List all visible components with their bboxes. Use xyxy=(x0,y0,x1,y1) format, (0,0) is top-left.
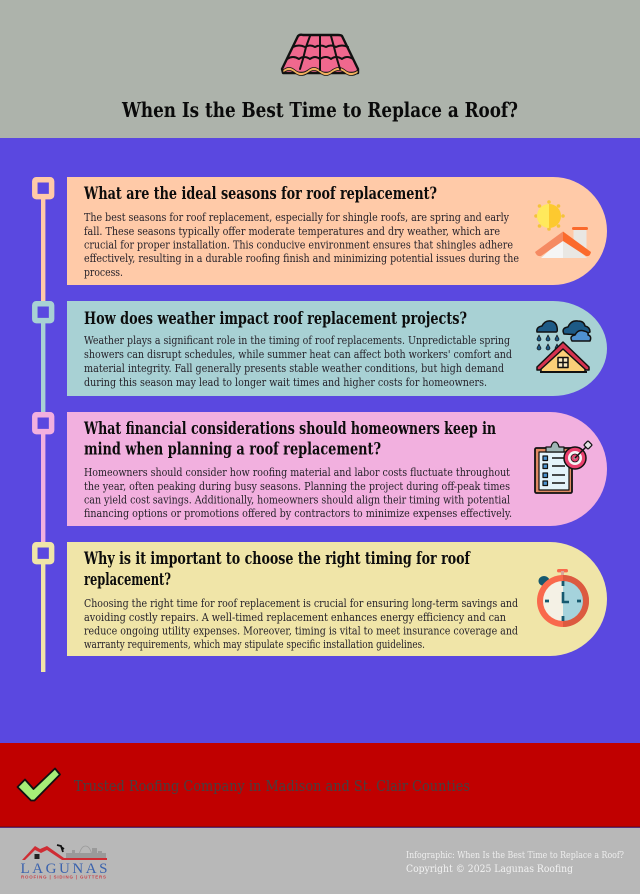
logo tagline: ROOFING | SIDING | GUTTERS xyxy=(21,874,106,880)
panel: ideal seasons xyxy=(67,177,607,285)
timeline xyxy=(35,180,52,672)
footer xyxy=(0,828,640,894)
header band xyxy=(0,0,640,138)
icon: rain clouds over house xyxy=(537,321,591,372)
text block: can yield cost savings. Additionally, homeowners should align their timing with potential xyxy=(84,494,511,506)
text block xyxy=(84,211,519,279)
icon: stopwatch xyxy=(537,569,589,627)
text block xyxy=(84,597,518,651)
banner: trusted company xyxy=(0,743,640,828)
text block: process. xyxy=(84,266,123,279)
logo xyxy=(20,845,108,880)
heading: mind when planning a roof replacement? xyxy=(84,438,381,458)
timeline marker 3 xyxy=(35,415,52,432)
text block: fall. These seasons typically offer moderate temperatures and dry weather, which are xyxy=(84,225,500,238)
text block: financing options or promotions offered by contractors to minimize expenses effectively. xyxy=(84,507,512,520)
text block: Choosing the right time for roof replacement is crucial for ensuring long-term savings and xyxy=(84,597,518,610)
logo wordmark: LAGUNAS xyxy=(20,861,108,877)
text block: warranty requirements, which may stipulate specific installation guidelines. xyxy=(84,638,425,651)
timeline marker 2 xyxy=(35,304,52,321)
heading: replacement? xyxy=(84,569,171,589)
text block: crucial for proper installation. This conducive environment ensures that shingles adhere xyxy=(84,238,513,252)
text block xyxy=(84,466,512,520)
panel: right timing xyxy=(67,542,607,656)
text block: material integrity. Fall generally presents stable weather conditions, but high demand xyxy=(84,362,504,375)
heading: How does weather impact roof replacement projects? xyxy=(84,308,467,328)
text block: avoiding costly repairs. A well-timed replacement enhances energy efficiency and can xyxy=(84,611,506,624)
text block: The best seasons for roof replacement, especially for shingle roofs, are spring and early xyxy=(84,211,509,224)
heading xyxy=(83,548,471,589)
text block: showers can disrupt schedules, while summer heat can affect both workers' comfort and xyxy=(84,348,512,361)
title: When Is the Best Time to Replace a Roof? xyxy=(121,98,518,122)
timeline marker 1 xyxy=(35,180,52,197)
copyright: Copyright © 2025 Lagunas Roofing xyxy=(406,863,573,875)
icon: sun and roof xyxy=(534,200,591,258)
heading: What are the ideal seasons for roof replacement? xyxy=(83,183,437,203)
panel: weather impact xyxy=(67,301,607,396)
text block: the year, often peaking during busy seasons. Planning the project during off-peak times xyxy=(84,480,510,493)
heading: What financial considerations should homeowners keep in xyxy=(83,418,496,438)
text block: Weather plays a significant role in the timing of roof replacements. Unpredictable spring xyxy=(84,334,510,347)
icon: clipboard and target xyxy=(535,441,592,493)
banner text: Trusted Roofing Company in Madison and St. Clair Counties xyxy=(74,777,470,795)
timeline marker 4 xyxy=(35,545,52,562)
text block xyxy=(84,334,512,389)
icon: check mark xyxy=(18,768,60,800)
text block: effectively, resulting in a durable roofing finish and minimizing potential issues during the xyxy=(84,252,519,265)
text block: during this season may lead to longer wait times and higher costs for homeowners. xyxy=(84,376,487,389)
panel: financial considerations xyxy=(67,412,607,526)
text block: Homeowners should consider how roofing material and labor costs fluctuate throughout xyxy=(84,466,511,479)
icon: roof tiles xyxy=(282,35,358,76)
text block: reduce ongoing utility expenses. Moreover, timing is vital to meet insurance coverage and xyxy=(84,624,518,638)
heading xyxy=(83,418,496,458)
heading: Why is it important to choose the right timing for roof xyxy=(83,548,471,568)
